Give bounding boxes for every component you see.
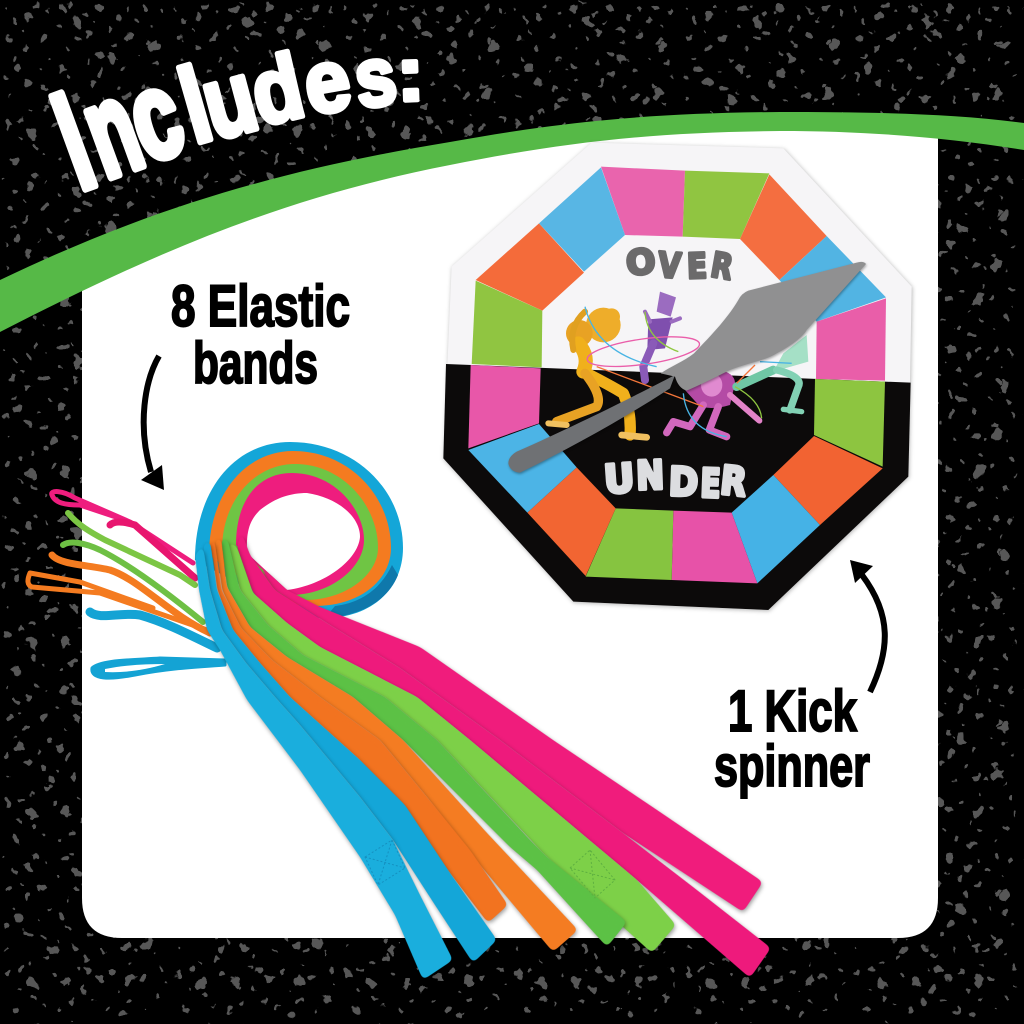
title: Includes: : (395, 31, 426, 118)
title: Includes: c (112, 45, 198, 189)
band tails: blue (203, 540, 497, 963)
board text: OVER: E (686, 245, 708, 287)
board: octagon base (443, 143, 912, 610)
board text: UNDER: N (635, 452, 665, 499)
title: Includes: u (190, 37, 268, 161)
label: 1 Kick spinner: spinner (714, 734, 870, 799)
band loop: centre opening (247, 493, 360, 590)
figure: coloured elastic hoops (585, 307, 792, 437)
label: 1 Kick spinner (714, 679, 870, 799)
board text: UNDER (602, 452, 749, 508)
label: 1 Kick spinner: 1 Kick (728, 679, 858, 744)
spinner arrow: grey pointer (508, 262, 866, 473)
green swoosh banner (0, 112, 1024, 332)
elastic bands (28, 442, 771, 980)
band ends: thin strands with loops (28, 492, 225, 678)
board text: UNDER: D (668, 458, 699, 505)
band loop: coils (195, 442, 403, 618)
title: Includes: e (296, 28, 358, 133)
figure: magenta dancer (667, 370, 759, 437)
arrow: to elastic bands (141, 356, 164, 490)
board text: OVER (624, 242, 736, 288)
board: coloured ring segments (468, 167, 886, 583)
board text: UNDER: R (718, 457, 749, 506)
title: Includes: l (167, 44, 223, 166)
label: 8 Elastic bands (171, 274, 350, 396)
board text: UNDER: U (602, 455, 636, 504)
board text: UNDER: E (700, 462, 721, 508)
board: black lower half (443, 364, 911, 610)
board text: OVER: R (708, 246, 736, 288)
title: Includes (35, 28, 426, 219)
title: Includes: d (242, 35, 313, 146)
board text: OVER: O (624, 242, 658, 285)
white content panel (82, 121, 938, 938)
band stitching (365, 840, 615, 898)
spinner board (443, 143, 912, 610)
figure: mint dancer (737, 335, 808, 412)
title: Includes: I (35, 62, 112, 219)
figure: yellow dancer (548, 308, 647, 437)
band tails: orange (215, 537, 578, 952)
board text: OVER: V (657, 244, 682, 287)
title: Includes: n (65, 53, 158, 205)
arrow: to kick spinner (850, 560, 885, 692)
figure: purple dancer (643, 292, 680, 380)
band tails: green (228, 540, 676, 953)
title: Includes: s (349, 28, 402, 126)
band tails: pink (241, 530, 763, 912)
label: 8 Elastic bands: bands (193, 331, 318, 396)
label: 8 Elastic bands: 8 Elastic (171, 274, 350, 339)
